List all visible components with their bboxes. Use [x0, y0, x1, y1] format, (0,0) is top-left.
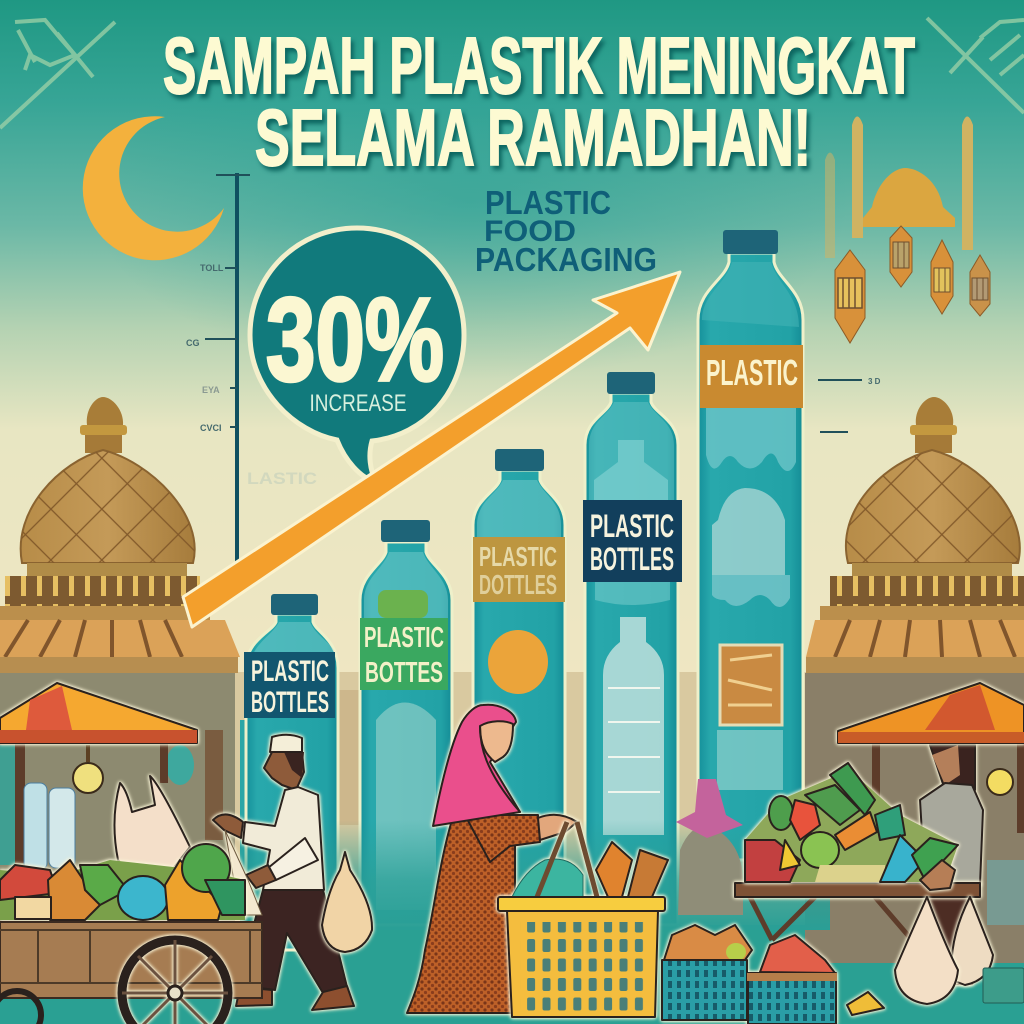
yellow item — [847, 992, 884, 1015]
mosque silhouette: top right — [825, 116, 973, 258]
crate and shelf — [983, 968, 1024, 1003]
distant shopper — [676, 779, 743, 915]
woman in pink hijab — [407, 705, 577, 1013]
bottle 4: PLASTIC — [590, 508, 674, 544]
icon: crescent moon — [83, 116, 224, 260]
plastic bags — [951, 897, 993, 985]
vendor — [920, 745, 983, 985]
heading: plastic food packaging: PACKAGING — [475, 241, 657, 278]
bottle 5: PLASTIC — [706, 352, 798, 393]
left market stall — [0, 683, 262, 1024]
lanterns — [835, 226, 990, 343]
chart axis with tick labels: EYA — [202, 385, 220, 395]
yellow shopping basket — [498, 822, 668, 1017]
bottle 1: PLASTIC — [251, 655, 329, 688]
produce pile — [745, 763, 958, 890]
bulb — [987, 769, 1013, 795]
right mosque — [806, 397, 1024, 673]
produce — [0, 844, 245, 920]
chart axis with tick labels: CG — [186, 338, 200, 348]
bottle 5 — [698, 230, 803, 860]
title — [163, 21, 915, 182]
bottle 1: BOTTLES — [251, 686, 329, 719]
hanging bulb — [86, 745, 90, 762]
chart axis with tick labels — [186, 173, 881, 567]
heading: plastic food packaging: PLASTIC — [485, 184, 611, 221]
left mosque — [0, 397, 240, 673]
bottle 2: BOTTES — [365, 657, 443, 689]
plastic bag held by man — [322, 852, 372, 952]
cart — [0, 922, 262, 998]
faint axis label: LASTIC — [247, 469, 317, 488]
ground fade over bottle bases — [240, 820, 830, 930]
growth arrow — [183, 272, 680, 627]
cart wheel — [122, 940, 228, 1024]
bottle 2 — [360, 520, 452, 925]
speech bubble: 30% increase: INCREASE — [310, 390, 406, 417]
bottle 3: DOTTLES — [479, 569, 557, 600]
small blue baskets — [662, 925, 837, 1024]
chart axis with tick labels: 3 D — [868, 377, 881, 386]
plastic bag — [114, 776, 190, 878]
bottle 2: PLASTIC — [364, 622, 444, 654]
chart axis with tick labels: TOLL — [200, 263, 224, 273]
canopy — [838, 683, 1024, 743]
lantern 1 — [835, 250, 865, 343]
heading: plastic food packaging — [475, 184, 657, 278]
bottle 3: PLASTIC — [479, 541, 557, 572]
lantern 3 — [931, 240, 953, 314]
bottle 4 — [583, 372, 682, 925]
right market stall — [735, 683, 1024, 1015]
man with cap — [213, 735, 354, 1010]
corner ornament: left — [0, 20, 115, 128]
table — [750, 897, 912, 940]
speech bubble: 30% increase — [250, 228, 464, 482]
chart axis with tick labels: CVCI — [200, 423, 222, 433]
lantern 4 — [970, 255, 990, 316]
bottle 4: BOTTLES — [590, 541, 674, 577]
bottle 1 — [244, 594, 338, 950]
speech bubble: 30% increase: 30% — [266, 274, 444, 406]
lantern 2 — [890, 226, 912, 287]
bottle 3 — [473, 449, 565, 925]
canopy — [0, 683, 197, 743]
corner ornament: right — [927, 18, 1024, 113]
heading: plastic food packaging: FOOD — [484, 215, 576, 248]
